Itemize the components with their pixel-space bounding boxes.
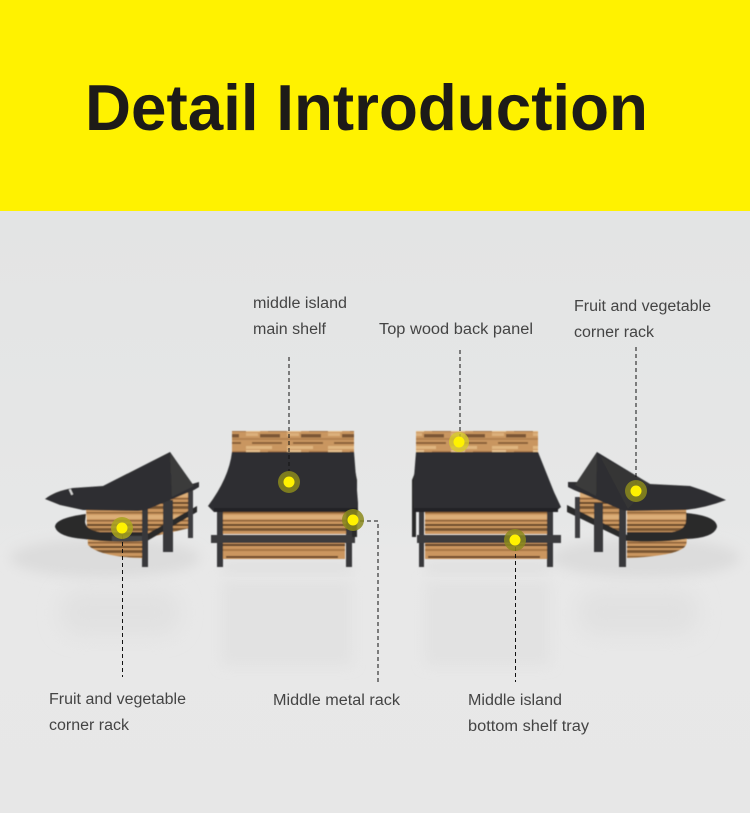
floor shadows and reflections	[10, 538, 740, 665]
callout: middle metal rack: Middle metal rack	[273, 692, 400, 709]
yellow header band	[0, 0, 750, 211]
product: middle rack left	[208, 431, 358, 567]
callout: middle island bottom shelf tray: Middle island	[468, 692, 562, 709]
product: middle rack right	[412, 431, 561, 567]
callout: left fruit and vegetable corner rack: Fruit and vegetable	[49, 691, 186, 708]
callout: right fruit and vegetable corner rack: Fruit and vegetable	[574, 298, 711, 315]
callout: middle island main shelf	[253, 295, 347, 493]
callout: middle island main shelf: middle island	[253, 295, 347, 312]
callout: right fruit and vegetable corner rack	[574, 298, 711, 502]
callout: middle island main shelf: main shelf	[253, 321, 327, 338]
callout: top wood back panel	[379, 321, 533, 452]
callout: left fruit and vegetable corner rack: corner rack	[49, 717, 129, 734]
callout: middle metal rack	[273, 509, 400, 709]
callout: top wood back panel: Top wood back panel	[379, 321, 533, 338]
callout: middle island bottom shelf tray	[468, 529, 589, 735]
gray background	[0, 211, 750, 813]
callout: right fruit and vegetable corner rack: corner rack	[574, 324, 654, 341]
callout: left fruit and vegetable corner rack	[49, 517, 186, 734]
product: left corner rack	[45, 452, 199, 567]
title: Detail Introduction	[85, 71, 648, 144]
callout: middle island bottom shelf tray: bottom shelf tray	[468, 718, 589, 735]
product: right corner rack	[567, 452, 726, 567]
